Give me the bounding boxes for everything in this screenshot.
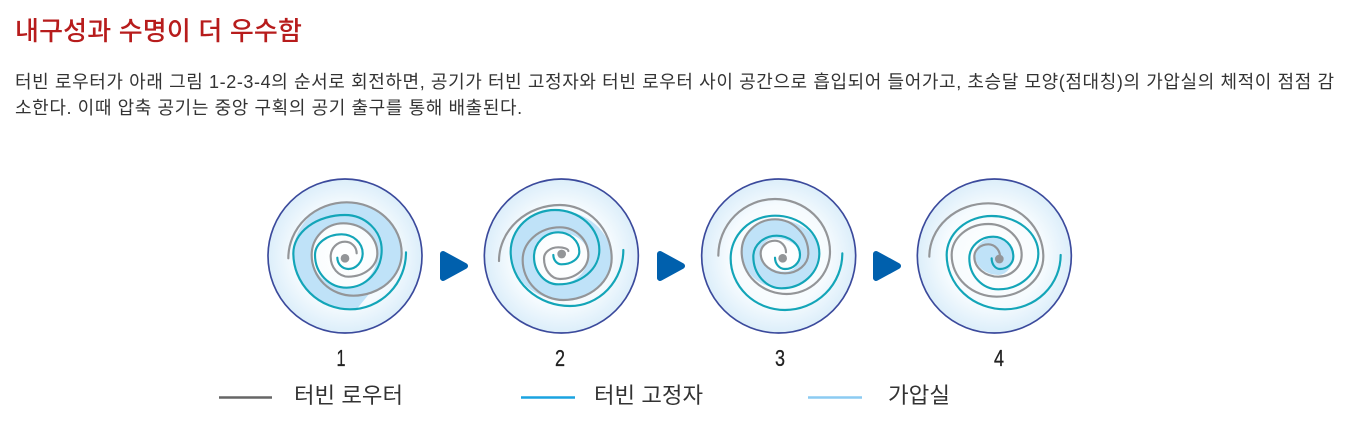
step 2 disc [484, 179, 638, 333]
title: 내구성과 수명이 더 우수함 [15, 11, 302, 48]
arrow 2 [660, 254, 682, 278]
step number 1: 1 [336, 345, 346, 371]
legend: pressure chamber: 가압실 [888, 378, 950, 410]
description text: 소한다. 이때 압축 공기는 중앙 구획의 공기 출구를 통해 배출된다. [15, 98, 523, 118]
step 4 disc [917, 179, 1071, 333]
legend: turbine rotor: 터빈 로우터 [294, 378, 403, 410]
step 1 disc [268, 179, 422, 333]
description text [15, 72, 1335, 118]
description text: 터빈 로우터가 아래 그림 1-2-3-4의 순서로 회전하면, 공기가 터빈 고정자와 터빈 로우터 사이 공간으로 흡입되어 들어가고, 초승달 모양(점대칭)의 가압실의 체적이 점점 감 [15, 72, 1335, 92]
step number 4: 4 [994, 345, 1004, 371]
step number 2: 2 [555, 345, 565, 371]
step 3 disc [702, 179, 856, 333]
legend: turbine stator: 터빈 고정자 [594, 378, 703, 410]
arrow 3 [876, 254, 898, 278]
arrow 1 [443, 254, 465, 278]
step number 3: 3 [775, 345, 785, 371]
